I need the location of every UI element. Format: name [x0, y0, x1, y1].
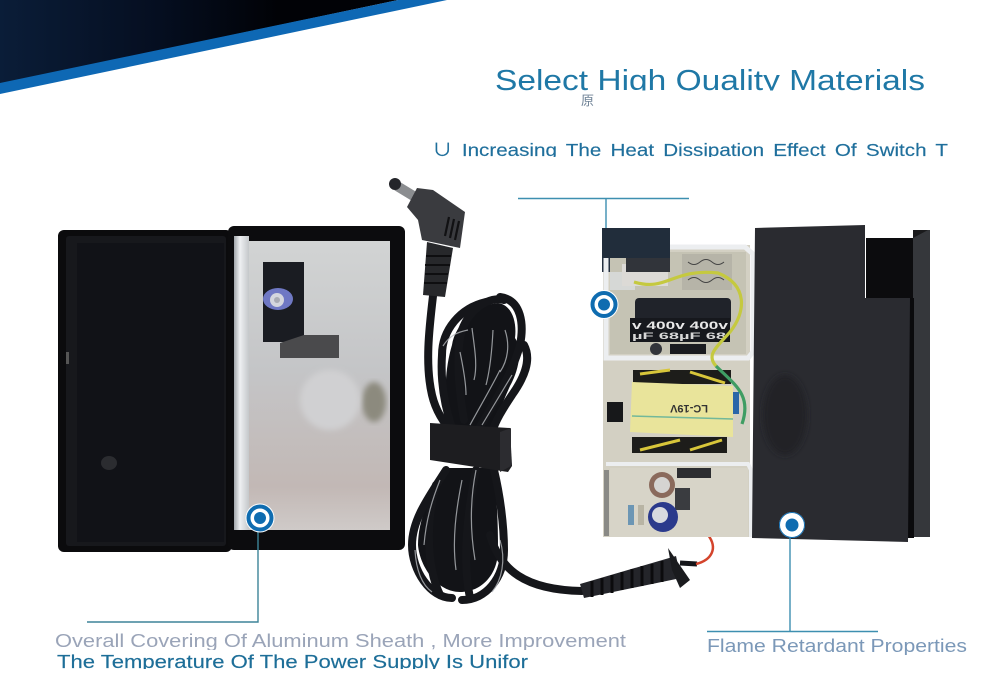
marker: aluminium sheath	[246, 504, 274, 532]
green-yellow wire	[634, 272, 741, 366]
AC strain relief	[580, 548, 697, 598]
left case: aluminium lined shell	[228, 226, 405, 550]
power supply circuit board	[602, 228, 753, 537]
small chip	[607, 402, 623, 422]
caption: flame retardant: Flame Retardant Properties	[707, 636, 967, 656]
leader line: switch tube callout	[518, 198, 689, 292]
tape patch	[280, 335, 339, 358]
small glyph under title: 原	[581, 93, 594, 108]
velcro strap	[430, 423, 512, 472]
heat connector block	[602, 228, 670, 272]
capacitors	[630, 298, 731, 355]
worn speckle	[362, 382, 386, 422]
caption: uniform temperature: The Temperature Of The Power Supply Is Unifor	[57, 652, 528, 672]
washer	[263, 288, 293, 310]
marker: switch tube	[590, 290, 618, 319]
capacitors: µF 68µF 68	[632, 331, 726, 341]
title: Select High Quality Materials	[495, 65, 925, 97]
DC plug tip	[389, 178, 465, 297]
leader line: flame retardant callout	[707, 537, 878, 632]
transformer: LC-19V	[669, 402, 708, 414]
top corner banner	[0, 0, 447, 94]
bottom bent metal shield	[604, 464, 751, 537]
capacitors: v 400v 400v	[632, 320, 729, 332]
power cable coil with strap and plugs	[389, 178, 713, 600]
cable highlights	[415, 328, 512, 592]
subtitle: heat dissipation: ∪ Increasing The Heat Dissipation Effect Of Switch T	[432, 140, 948, 160]
black flame-retardant cover	[752, 225, 930, 542]
caption: aluminium sheath: Overall Covering Of Aluminum Sheath , More Improvement	[55, 631, 626, 651]
red wire	[696, 535, 713, 564]
coil windings	[412, 296, 582, 600]
transformer	[630, 370, 733, 453]
marker: flame retardant	[779, 512, 805, 538]
leader line: aluminium sheath callout	[87, 532, 258, 622]
dense coil masses	[446, 303, 519, 445]
left case: lid	[58, 230, 232, 552]
top bent metal shield	[602, 228, 753, 358]
black window	[263, 262, 304, 342]
